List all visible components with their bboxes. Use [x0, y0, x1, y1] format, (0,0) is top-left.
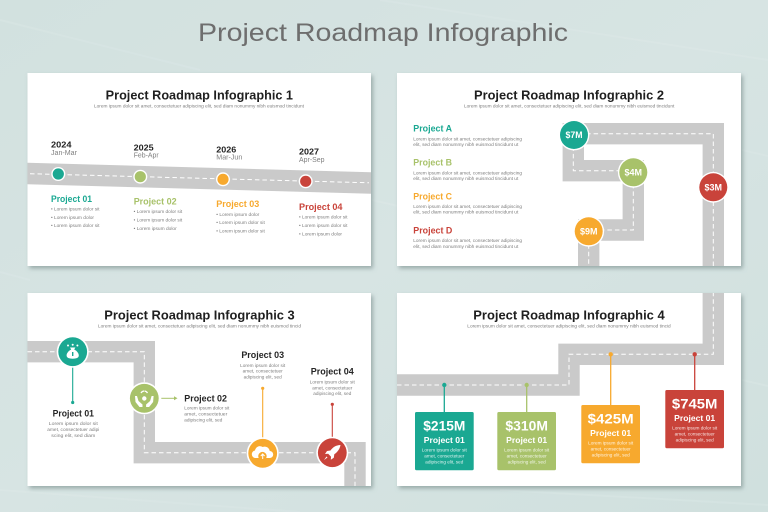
marker $9M [573, 216, 604, 247]
card $310M [497, 383, 556, 470]
Project B text [413, 158, 523, 181]
Project 04 text: Project 04 [311, 367, 354, 377]
Project 01 text: Lorem ipsum dolor sit [49, 421, 99, 426]
milestone 2027 [299, 147, 348, 236]
card $310M: $310M [505, 418, 548, 433]
icon: hands holding [128, 382, 160, 414]
Project B text: Project B [413, 158, 452, 169]
Project D text: Lorem ipsum dolor sit amet, consectetuer adipiscing [413, 238, 523, 243]
winding road [573, 134, 713, 266]
Project C text: elit, sed diam nonummy nibh euismod tincidunt ut [413, 210, 519, 215]
Project A text: Project A [413, 124, 452, 135]
Project D text: Project D [413, 225, 452, 236]
milestone 2025: Project 02 [134, 197, 177, 208]
milestone 2027: 2027 [299, 147, 319, 157]
Project 04 text: amet, consectetuer [312, 386, 353, 390]
Project 04 text: adipiscing elit, sed [313, 391, 352, 396]
Project 01 text: Project 01 [53, 408, 94, 418]
panel: roadmap infographic 1 [28, 73, 371, 266]
marker $7M [559, 120, 589, 150]
card $215M: adipiscing elit, sed [425, 460, 464, 464]
card $215M [415, 383, 474, 470]
milestone 2024: Project 01 [51, 194, 93, 205]
Project 01 text: amet, consectetuer adipi [47, 427, 99, 432]
Project 01 text [47, 408, 99, 438]
Project B text: Lorem ipsum dolor sit amet, consectetuer adipiscing [413, 170, 523, 175]
panel 1 subtitle: Lorem ipsum dolor sit amet, consectetuer adipiscing elit, sed diam nonummy nibh euismod tincidunt [94, 104, 305, 109]
icon: money bag [57, 336, 89, 368]
card $310M: amet, consectetuer [507, 454, 547, 458]
milestone 2027: • Lorem ipsum dolor [299, 232, 343, 236]
stem to Project 01 [71, 367, 74, 404]
card $425M: Project 01 [590, 428, 631, 438]
Project A text: Lorem ipsum dolor sit amet, consectetuer adipiscing [413, 136, 523, 142]
milestone 2026: • Lorem ipsum dolor [216, 212, 260, 217]
card $425M: amet, consectetuer [591, 446, 631, 452]
card $310M: adipiscing elit, sed [508, 460, 546, 464]
winding road [397, 293, 713, 385]
milestone 2027: Project 04 [299, 202, 343, 213]
milestone 2026: Project 03 [216, 199, 259, 210]
Project 03 text [240, 350, 286, 380]
Project 03 text: Project 03 [241, 350, 284, 360]
Project D text [413, 225, 523, 249]
Project A text: elit, sed diam nonummy nibh euismod tincidunt ut [413, 142, 519, 147]
milestone 2024 [51, 140, 100, 228]
arrow to Project 02 [161, 396, 178, 400]
Project 04 text [310, 367, 356, 396]
milestone 2024: • Lorem ipsum dolor sit [51, 223, 100, 228]
card $310M: Project 01 [506, 435, 547, 445]
stem to Project 03 [261, 387, 264, 438]
marker $4M [618, 157, 649, 188]
Project 02 text: Lorem ipsum dolor sit [184, 406, 230, 410]
panel 1 heading: Project Roadmap Infographic 1 [106, 88, 293, 102]
marker $7M: $7M [566, 130, 583, 141]
milestone 2024: • Lorem ipsum dolor [51, 215, 95, 220]
milestone 2027: • Lorem ipsum dolor sit [299, 214, 348, 220]
Project 02 text [184, 393, 230, 422]
Project 03 text: amet, consectetuer [243, 369, 283, 374]
panel 2 heading: Project Roadmap Infographic 2 [474, 88, 664, 102]
milestone 2025: • Lorem ipsum dolor sit [134, 209, 183, 214]
marker $3M [698, 172, 729, 203]
card $215M: Project 01 [424, 435, 465, 445]
milestone 2026: • Lorem ipsum dolor sit [216, 228, 266, 234]
card $745M: adipiscing elit, sed [676, 438, 714, 442]
icon: rocket [316, 437, 348, 469]
sloped road [28, 163, 371, 194]
Project 01 text: scing elit, sed diam [51, 433, 96, 438]
milestone 2027: • Lorem ipsum dolor sit [299, 223, 348, 228]
card $215M: Lorem ipsum dolor sit [422, 448, 468, 452]
card $425M [581, 352, 640, 463]
milestone 2026 [216, 144, 266, 234]
milestone 2026: 2026 [216, 144, 237, 154]
Project C text: Project C [413, 191, 452, 202]
card $310M: Lorem ipsum dolor sit [504, 448, 550, 452]
panel 2 subtitle: Lorem ipsum dolor sit amet, consectetuer adipiscing elit, sed diam nonummy nibh euismod tincidunt [464, 104, 675, 109]
milestone 2025: Feb-Apr [134, 153, 159, 160]
Project 03 text: adipiscing elit, sed [244, 374, 282, 380]
milestone 2024: Jan-Mar [51, 150, 78, 157]
milestone 2025: • Lorem ipsum dolor sit [134, 218, 183, 222]
milestone 2025 [133, 142, 183, 231]
marker $9M: $9M [580, 226, 598, 238]
milestone 2024: 2024 [51, 140, 72, 150]
card $425M: Lorem ipsum dolor sit [588, 440, 634, 446]
milestone 2026: • Lorem ipsum dolor sit [216, 220, 266, 225]
Project 04 text: Lorem ipsum dolor sit [310, 380, 356, 384]
card $425M: adipiscing elit, sed [592, 452, 630, 458]
marker $4M: $4M [625, 168, 642, 178]
Project B text: elit, sed diam nonummy nibh euismod tincidunt ut [413, 176, 519, 181]
panel 3 subtitle: Lorem ipsum dolor sit amet, consectetuer adipiscing elit, sed diam nonummy nibh euismod tincid [98, 324, 302, 329]
panel 3 heading: Project Roadmap Infographic 3 [104, 308, 295, 322]
milestone 2025: • Lorem ipsum dolor [134, 226, 177, 231]
card $215M: $215M [423, 418, 465, 433]
milestone 2024: • Lorem ipsum dolor sit [51, 206, 100, 212]
Project C text: Lorem ipsum dolor sit amet, consectetuer adipiscing [413, 204, 523, 209]
panel 4 subtitle: Lorem ipsum dolor sit amet, consectetuer adipiscing elit, sed diam nonummy nibh euismod tincid [467, 324, 671, 329]
panel: roadmap infographic 3 [28, 293, 371, 486]
Project 03 text: Lorem ipsum dolor sit [240, 363, 286, 368]
milestone 2027: Apr-Sep [299, 157, 325, 164]
title: Project Roadmap Infographic [198, 19, 568, 47]
Project A text [413, 124, 523, 147]
milestone 2026: Mar-Jun [216, 155, 242, 162]
panel 4 heading: Project Roadmap Infographic 4 [473, 308, 665, 322]
marker $3M: $3M [705, 182, 722, 194]
icon: cloud upload [247, 437, 279, 469]
Project 02 text: amet, consectetuer [184, 412, 228, 416]
stem to Project 04 [331, 403, 334, 437]
Project 02 text: Project 02 [184, 393, 227, 403]
panel: roadmap infographic 2 [397, 73, 741, 266]
card $745M: $745M [672, 396, 717, 411]
Project 02 text: adipiscing elit, sed [184, 418, 223, 422]
card $425M: $425M [588, 411, 634, 426]
card $745M: amet, consectetuer [675, 432, 715, 436]
winding road [28, 352, 355, 486]
Project D text: elit, sed diam nonummy nibh euismod tincidunt ut [413, 244, 519, 249]
card $745M: Lorem ipsum dolor sit [672, 426, 718, 430]
card $215M: amet, consectetuer [424, 454, 465, 458]
Project C text [413, 191, 523, 215]
card $745M [665, 352, 724, 448]
panel: roadmap infographic 4 [397, 293, 741, 486]
card $745M: Project 01 [674, 413, 715, 423]
milestone 2025: 2025 [134, 142, 154, 152]
